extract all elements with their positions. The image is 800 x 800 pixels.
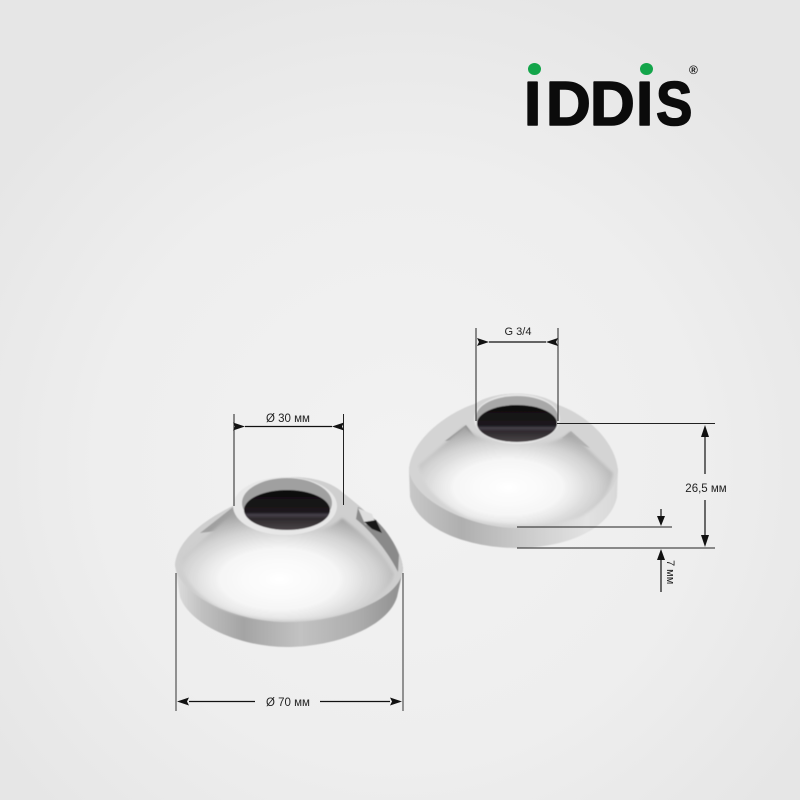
- logo: IDDIS: [524, 63, 698, 139]
- right dome: [409, 394, 618, 528]
- right cone highlight: [419, 426, 613, 525]
- left dome: [175, 477, 403, 622]
- registered mark: ®: [689, 63, 698, 77]
- dimension: 7 mm: 7 мм: [664, 560, 676, 584]
- left cone highlight: [182, 512, 394, 620]
- logo green dot right: [640, 63, 653, 75]
- right collar: [474, 394, 560, 444]
- left collar: [233, 477, 337, 535]
- dimension: 30 mm: Ø 30 мм: [266, 413, 310, 425]
- logo wordmark: IDDI: [524, 70, 653, 139]
- right thread: [476, 396, 558, 438]
- left reflection: [356, 507, 399, 572]
- left shadow wedge: [200, 507, 240, 533]
- right hole: [477, 405, 557, 442]
- dimension: G 3/4: G 3/4: [505, 326, 531, 338]
- right shadow wedges: [445, 425, 476, 441]
- left hole: [244, 490, 330, 530]
- dimension: 26,5 mm: [517, 424, 727, 548]
- dimension: 70 mm: Ø 70 мм: [266, 697, 310, 709]
- dimension: 26,5 mm: 26,5 мм: [685, 483, 727, 495]
- logo wordmark: S: [656, 70, 692, 139]
- logo green dot left: [528, 63, 541, 75]
- left escutcheon: [175, 477, 403, 647]
- left body: [175, 477, 403, 647]
- right escutcheon: [409, 394, 618, 548]
- dimension: 30 mm: [234, 413, 344, 506]
- left thread: [242, 478, 332, 528]
- dimension: 70 mm: [176, 573, 403, 711]
- dimension: G 3/4: [476, 326, 558, 421]
- dimension: 7 mm: [517, 509, 676, 592]
- right body: [409, 394, 618, 548]
